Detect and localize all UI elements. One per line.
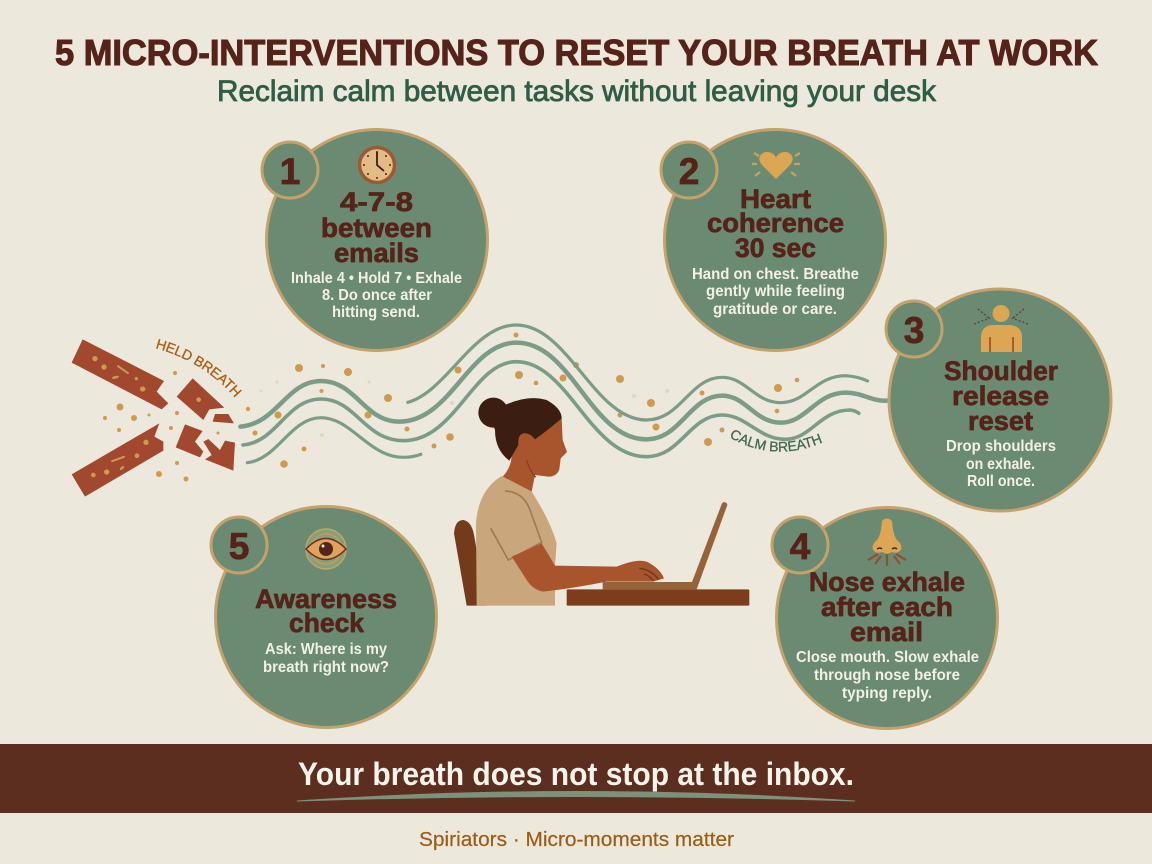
underline swoosh: [297, 792, 855, 801]
icon: nose: [868, 518, 906, 566]
heading: Awareness: [255, 584, 397, 614]
hair: [478, 398, 562, 461]
body text: [796, 649, 979, 702]
badge 4: [772, 517, 828, 573]
laptop: [603, 502, 727, 589]
heading: after each: [821, 592, 953, 622]
body text: through nose before: [814, 667, 960, 684]
sleeve seam: [491, 491, 542, 560]
badge 3: [886, 301, 942, 357]
body text: gratitude or care.: [713, 301, 837, 318]
heading: between: [321, 213, 432, 243]
body text: [692, 266, 859, 318]
heading: check: [289, 608, 365, 638]
subtitle: Reclaim calm between tasks without leaving your desk: [217, 75, 937, 108]
body text: Close mouth. Slow exhale: [796, 649, 979, 666]
body text: Drop shoulders: [946, 438, 1056, 455]
heading: Heart: [740, 184, 811, 214]
heading: [255, 584, 397, 638]
icon: heart: [752, 152, 800, 179]
heading: [321, 187, 432, 268]
icon: eye: [306, 529, 346, 569]
heading: reset: [968, 406, 1033, 436]
heading: [707, 184, 844, 263]
shirt: [476, 476, 557, 606]
chair: [454, 520, 487, 606]
banner message: Your breath does not stop at the inbox.: [298, 756, 854, 792]
heading: Nose exhale: [809, 567, 965, 597]
badge 1: [262, 142, 318, 198]
body text: typing reply.: [842, 685, 932, 702]
badge 2: 2: [679, 151, 699, 192]
heading: Shoulder: [944, 356, 1058, 386]
heading: coherence: [707, 208, 844, 238]
body text: Ask: Where is my: [265, 641, 387, 658]
badge 3: 3: [904, 310, 924, 351]
held breath label: HELD BREATH: [156, 339, 242, 398]
scattered dots: [103, 332, 799, 482]
heading: [944, 356, 1058, 436]
heading: 30 sec: [735, 233, 816, 263]
body text: [946, 438, 1056, 490]
desk: [567, 589, 749, 606]
arm: [512, 543, 664, 592]
bottom banner: [0, 744, 1152, 813]
badge 4: 4: [790, 526, 811, 567]
badge 1: 1: [280, 151, 300, 192]
panel: 3 shoulder release: [886, 289, 1111, 511]
body text: [263, 641, 389, 676]
body text: Inhale 4 • Hold 7 • Exhale: [291, 270, 462, 287]
badge 2: [661, 142, 717, 198]
calm breath label: CALM BREATH: [731, 430, 822, 452]
neck and face: [503, 418, 567, 492]
calm breath waves: [240, 325, 887, 463]
badge 5: 5: [229, 526, 249, 567]
body text: on exhale.: [966, 456, 1035, 473]
icon: broken held breath bars: [72, 339, 235, 497]
heading: emails: [334, 238, 419, 268]
body text: hitting send.: [332, 304, 420, 321]
icon: clock: [360, 148, 394, 182]
body text: breath right now?: [263, 659, 389, 676]
body text: [291, 270, 462, 321]
panel: 2 heart coherence: [661, 130, 886, 350]
body text: 8. Do once after: [322, 287, 432, 304]
heading: email: [850, 617, 923, 647]
person at laptop: [454, 398, 749, 606]
footer: Spiriators · Micro-moments matter: [419, 829, 734, 851]
panel: 1 4-7-8 between emails: [262, 130, 488, 350]
panel: 4 nose exhale: [772, 508, 998, 728]
heading: 4-7-8: [340, 187, 413, 217]
pale dots: [260, 380, 669, 437]
body text: Roll once.: [967, 473, 1035, 490]
panel: 5 awareness check: [211, 506, 436, 728]
icon: shoulders: [974, 305, 1028, 352]
title: 5 MICRO-INTERVENTIONS TO RESET YOUR BREATH AT WORK: [55, 32, 1098, 73]
body text: Hand on chest. Breathe: [692, 266, 859, 283]
heading: [809, 567, 965, 647]
badge 5: [211, 517, 267, 573]
body text: gently while feeling: [706, 283, 845, 300]
heading: release: [952, 381, 1049, 411]
